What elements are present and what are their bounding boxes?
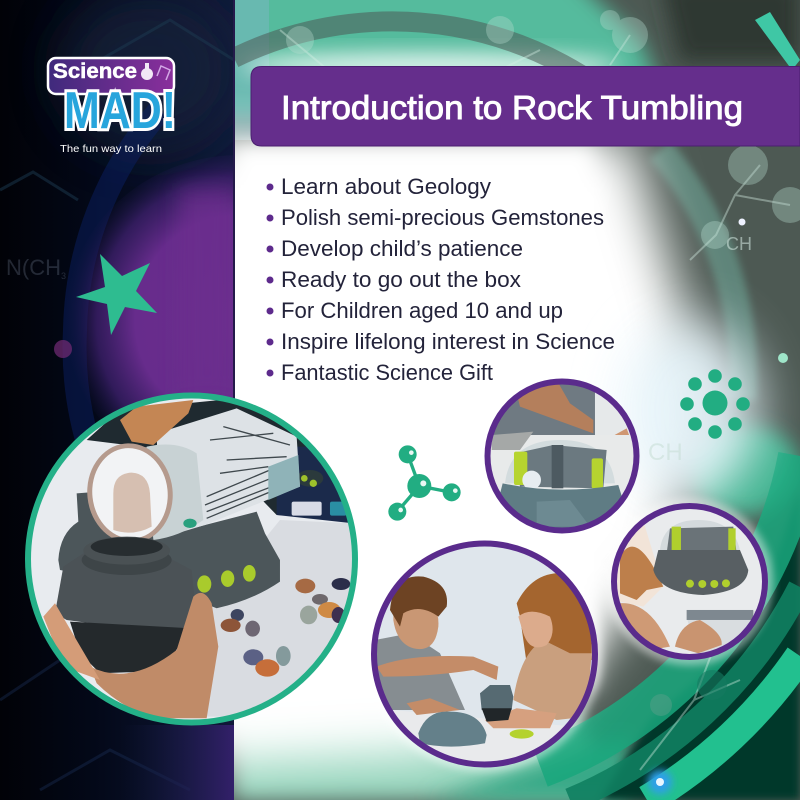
star icon	[76, 254, 157, 335]
bullet 7: Fantastic Science Gift	[281, 360, 493, 385]
left dark panel background	[0, 0, 234, 800]
bullet 2: Polish semi-precious Gemstones	[281, 205, 604, 230]
faint formula text: 3	[61, 271, 66, 281]
right panel background	[234, 0, 800, 800]
logo word MAD: MAD!	[64, 82, 176, 140]
gemstones	[295, 579, 315, 593]
bullet list	[266, 174, 615, 385]
photo: tumbler with buttons	[606, 498, 774, 666]
machine base	[58, 490, 280, 608]
bullet 5: For Children aged 10 and up	[281, 298, 563, 323]
bullet 4: Ready to go out the box	[281, 267, 521, 292]
icon: green dot ring	[680, 369, 750, 439]
girl	[517, 573, 592, 663]
boy	[375, 633, 465, 710]
jar	[157, 408, 300, 538]
hands	[90, 593, 218, 718]
tumbler barrel	[56, 570, 193, 628]
right panel background: CH	[648, 439, 683, 466]
product box	[277, 447, 353, 523]
photo: pouring jar into tumbler	[28, 396, 355, 722]
bullet 1: Learn about Geology	[281, 174, 491, 199]
logo: Science Mad	[48, 58, 176, 155]
logo flask icon	[141, 63, 170, 80]
teal diagonal accent	[755, 12, 800, 70]
faint molecule network	[280, 30, 790, 770]
title: Introduction to Rock Tumbling	[281, 89, 743, 126]
icon: molecule	[388, 445, 461, 521]
lower green concentric bands	[540, 456, 800, 766]
photo: two children with tumbler	[366, 536, 602, 772]
lid	[87, 443, 173, 539]
right teal arc	[660, 150, 743, 400]
bullet 3: Develop child’s patience	[281, 236, 523, 261]
bullet 6: Inspire lifelong interest in Science	[281, 329, 615, 354]
panel separator line	[233, 0, 235, 400]
glow dot	[778, 353, 788, 363]
logo word Science: Science	[53, 60, 137, 83]
white glow centre	[150, 135, 700, 770]
top grey arc	[235, 11, 586, 67]
right panel background: CH	[726, 234, 752, 254]
logo tagline: The fun way to learn	[60, 143, 162, 155]
blue light spot	[648, 770, 672, 794]
title banner	[251, 66, 800, 146]
faint formula text: N(CH	[6, 255, 61, 280]
photo: tumbler close-up with dome	[483, 380, 640, 535]
machine parts	[480, 685, 513, 710]
